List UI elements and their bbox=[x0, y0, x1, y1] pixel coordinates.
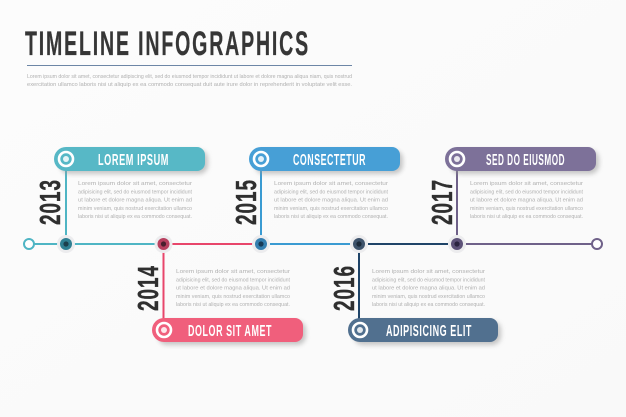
heading: DOLOR SIT AMET bbox=[188, 323, 272, 340]
description: laboris nisi ut aliquip ex ea commodo consequat. bbox=[78, 214, 192, 220]
description bbox=[372, 269, 485, 308]
milestone 2017 bbox=[427, 147, 599, 253]
node bbox=[448, 235, 466, 253]
heading: CONSECTETUR bbox=[293, 152, 366, 169]
description: adipisicing elit, sed do eiusmod tempor incididunt bbox=[274, 189, 388, 195]
milestone 2014 bbox=[133, 235, 306, 345]
description: laboris nisi ut aliquip ex ea commodo consequat. bbox=[470, 214, 583, 220]
description: Lorem ipsum dolor sit amet, consectetur bbox=[274, 181, 388, 187]
label pill bbox=[348, 318, 498, 342]
ring icon bbox=[59, 152, 73, 166]
node bbox=[154, 235, 172, 253]
node bbox=[57, 235, 75, 253]
description bbox=[176, 269, 290, 308]
description: minim veniam, quis nostrud exercitation ullamco bbox=[470, 206, 583, 212]
description: Lorem ipsum dolor sit amet, consectetur bbox=[176, 269, 290, 275]
description: Lorem ipsum dolor sit amet, consectetur bbox=[470, 181, 583, 187]
milestone 2013 bbox=[35, 147, 208, 253]
description bbox=[470, 181, 583, 220]
description: minim veniam, quis nostrud exercitation ullamco bbox=[274, 206, 388, 212]
description: adipisicing elit, sed do eiusmod tempor incididunt bbox=[372, 277, 485, 283]
timeline start marker bbox=[24, 239, 34, 249]
intro text block: exercitation ullamco laboris nisi ut aliquip ex ea commodo consequat duit aute irure dolor in reprehenderit in voluptate velit esse. bbox=[27, 82, 352, 88]
intro text block bbox=[27, 65, 352, 88]
ring icon bbox=[353, 323, 367, 337]
milestone 2016 bbox=[329, 235, 501, 345]
description: laboris nisi ut aliquip ex ea commodo consequat. bbox=[274, 214, 388, 220]
description: ut labore et dolore magna aliqua. Ut enim ad bbox=[372, 286, 485, 292]
year: 2016 bbox=[329, 265, 361, 311]
description: adipisicing elit, sed do eiusmod tempor incididunt bbox=[176, 277, 290, 283]
description: ut labore et dolore magna aliqua. Ut enim ad bbox=[470, 198, 583, 204]
description bbox=[274, 181, 388, 220]
timeline end marker bbox=[592, 239, 602, 249]
description: Lorem ipsum dolor sit amet, consectetur bbox=[78, 181, 192, 187]
label pill bbox=[249, 147, 400, 171]
description: minim veniam, quis nostrud exercitation ullamco bbox=[78, 206, 192, 212]
year: 2014 bbox=[133, 265, 165, 311]
description: ut labore et dolore magna aliqua. Ut enim ad bbox=[78, 198, 192, 204]
description: ut labore et dolore magna aliqua. Ut enim ad bbox=[176, 286, 290, 292]
description: Lorem ipsum dolor sit amet, consectetur bbox=[372, 269, 485, 275]
description: adipisicing elit, sed do eiusmod tempor incididunt bbox=[78, 189, 192, 195]
year: 2013 bbox=[35, 179, 67, 225]
description: laboris nisi ut aliquip ex ea commodo consequat. bbox=[176, 302, 290, 308]
node bbox=[350, 235, 368, 253]
label pill bbox=[54, 147, 205, 171]
description: minim veniam, quis nostrud exercitation ullamco bbox=[176, 294, 290, 300]
description bbox=[78, 181, 192, 220]
label pill bbox=[445, 147, 596, 171]
intro text block: Lorem ipsum dolor sit amet, consectetur adipiscing elit, sed do eiusmod tempor incididunt ut labore et dolore magna aliqua niam, quis nostrud bbox=[27, 74, 352, 80]
ring icon bbox=[450, 152, 464, 166]
description: laboris nisi ut aliquip ex ea commodo consequat. bbox=[372, 302, 485, 308]
year: 2015 bbox=[231, 179, 263, 225]
ring icon bbox=[157, 323, 171, 337]
ring icon bbox=[254, 152, 268, 166]
title: TIMELINE INFOGRAPHICS bbox=[25, 25, 310, 63]
description: ut labore et dolore magna aliqua. Ut enim ad bbox=[274, 198, 388, 204]
description: adipisicing elit, sed do eiusmod tempor incididunt bbox=[470, 189, 583, 195]
year: 2017 bbox=[427, 179, 459, 225]
heading: ADIPISICING ELIT bbox=[386, 323, 472, 340]
timeline axis bbox=[34, 243, 592, 245]
milestone 2015 bbox=[231, 147, 403, 253]
description: minim veniam, quis nostrud exercitation ullamco bbox=[372, 294, 485, 300]
label pill bbox=[152, 318, 303, 342]
node bbox=[252, 235, 270, 253]
heading: LOREM IPSUM bbox=[98, 152, 169, 169]
